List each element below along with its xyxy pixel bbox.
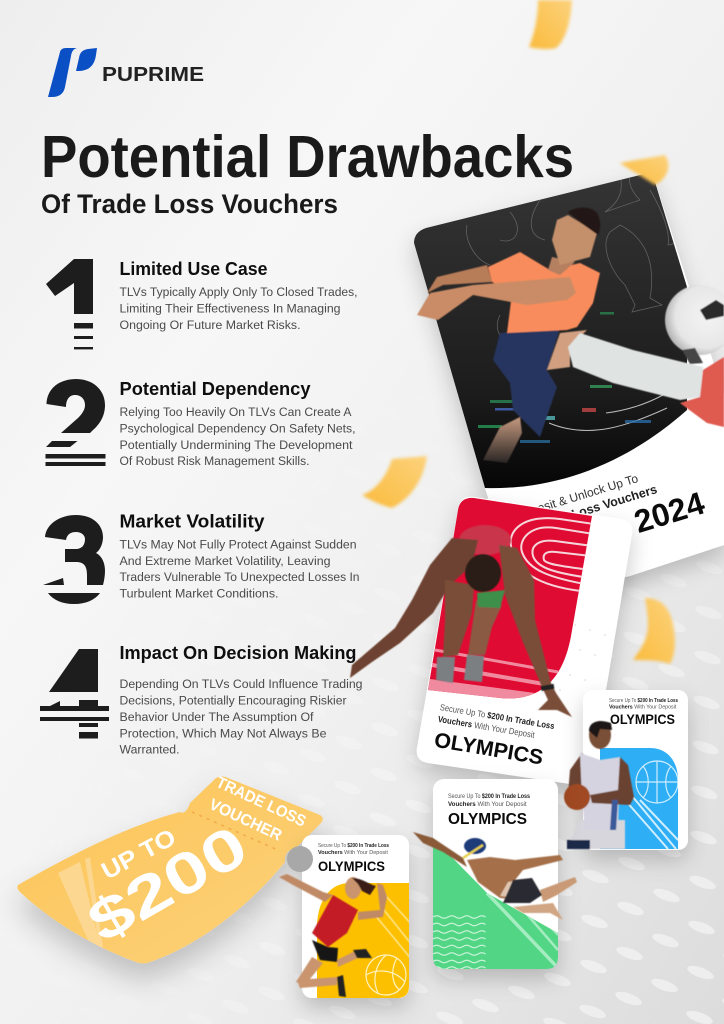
numeral 2 — [46, 379, 106, 466]
item 3: Market Volatility: TLVs May Not Fully Protect Against Sudden — [120, 538, 357, 552]
numeral 3 — [43, 515, 105, 604]
perforation — [192, 812, 280, 851]
trophy outlines — [466, 178, 674, 336]
trade loss voucher ticket — [17, 774, 323, 964]
numeral 1 — [46, 259, 93, 349]
red card text: OLYMPICS — [433, 729, 545, 770]
item 2: Potential Dependency: Of Robust Risk Management Skills. — [120, 454, 310, 468]
item 1: Limited Use Case: Limiting Their Effectiveness In Managing — [120, 302, 341, 316]
item 4: Impact On Decision Making: Impact On Decision Making — [120, 643, 356, 663]
red panel — [428, 498, 592, 698]
item 3: Market Volatility: And Extreme Market Volatility, Leaving — [120, 554, 331, 568]
blue panel — [600, 748, 678, 849]
gray ball — [287, 846, 313, 872]
item 2: Potential Dependency — [120, 379, 356, 468]
runner figure — [350, 525, 572, 717]
item 3: Market Volatility: Turbulent Market Conditions. — [120, 586, 278, 600]
card text: OLYMPICS — [318, 859, 385, 874]
volleyball and stripes — [366, 895, 412, 995]
volleyball player figure — [279, 874, 387, 997]
basketball player figure — [564, 721, 634, 849]
card text: Trade Loss Vouchers — [535, 482, 659, 532]
card text: OLYMPICS — [610, 712, 675, 727]
card text: Secure Up To $200 In Trade Loss — [448, 793, 530, 800]
card: volleyball voucher — [279, 835, 412, 998]
ticket text: $200 — [77, 813, 258, 955]
item 1: Limited Use Case: Ongoing Or Future Market Risks. — [120, 318, 300, 332]
card text: Vouchers With Your Deposit — [318, 850, 388, 856]
item 2: Potential Dependency: Potential Dependency — [120, 379, 310, 399]
item 4: Impact On Decision Making: Warranted. — [120, 742, 180, 756]
item 1: Limited Use Case: Limited Use Case — [120, 259, 268, 279]
title: Potential Drawbacks — [41, 124, 574, 190]
gold flake over card — [620, 155, 668, 185]
red card text: Secure Up To $200 In Trade Loss — [439, 702, 555, 731]
item 4: Impact On Decision Making: Depending On TLVs Could Influence Trading — [120, 677, 363, 691]
item 4: Impact On Decision Making — [120, 643, 363, 756]
basketball outline and stripes — [625, 761, 678, 849]
card text — [318, 843, 389, 874]
dot texture — [559, 624, 606, 691]
item 1: Limited Use Case: TLVs Typically Apply Only To Closed Trades, — [120, 285, 358, 299]
subtitle: Of Trade Loss Vouchers — [41, 189, 338, 219]
card: football voucher — [414, 172, 724, 600]
card text: Secure Up To $200 In Trade Loss — [318, 843, 389, 849]
card text — [609, 698, 678, 727]
red card text — [433, 702, 555, 771]
stub stripes — [58, 857, 103, 948]
card text: OLYMPICS — [448, 811, 527, 828]
item 3: Market Volatility — [120, 512, 360, 600]
item 4: Impact On Decision Making: Decisions, Potentially Encouraging Riskier — [120, 694, 346, 708]
item 2: Potential Dependency: Psychological Dependency On Safety Nets, — [120, 422, 356, 436]
card: basketball voucher — [564, 690, 688, 850]
ticket text: TRADE LOSS — [213, 774, 309, 831]
card text: 2024 — [630, 485, 709, 540]
item 4: Impact On Decision Making: Behavior Under The Assumption Of — [120, 710, 314, 724]
card text: Deposit & Unlock Up To — [515, 471, 640, 522]
card: red athletics voucher — [350, 497, 632, 785]
glitch and arc details — [478, 312, 667, 443]
track lines — [425, 518, 600, 705]
card text: Secure Up To $200 In Trade Loss — [609, 698, 678, 704]
card: swimming voucher — [413, 779, 577, 969]
ticket text — [77, 774, 309, 955]
item 4: Impact On Decision Making: Protection, Which May Not Always Be — [120, 726, 327, 740]
ticket text: VOUCHER — [206, 796, 285, 845]
ticket text: UP TO — [97, 824, 180, 885]
item 2: Potential Dependency: Potentially Undermining The Development — [120, 438, 353, 452]
red card text: Vouchers With Your Deposit — [437, 714, 536, 740]
dark photo panel — [414, 172, 687, 488]
card text: Vouchers With Your Deposit — [448, 801, 527, 808]
card text: Vouchers With Your Deposit — [609, 704, 677, 710]
green panel — [433, 838, 558, 969]
numeral 4 — [40, 649, 109, 738]
gold flakes — [362, 0, 675, 664]
swimmer figure — [413, 832, 577, 920]
item 1: Limited Use Case — [120, 259, 358, 332]
card text — [448, 793, 530, 828]
card text — [515, 455, 709, 572]
footballer figure — [417, 208, 724, 463]
item 3: Market Volatility: Market Volatility — [120, 512, 264, 532]
yellow panel — [317, 883, 409, 998]
logo: PUPRIME — [48, 48, 204, 97]
waves and stripes — [433, 893, 558, 969]
item 3: Market Volatility: Traders Vulnerable To Unexpected Losses In — [120, 570, 360, 584]
logo: PUPRIME: PUPRIME — [102, 64, 204, 86]
background — [391, 556, 724, 1024]
item 2: Potential Dependency: Relying Too Heavily On TLVs Can Create A — [120, 405, 352, 419]
